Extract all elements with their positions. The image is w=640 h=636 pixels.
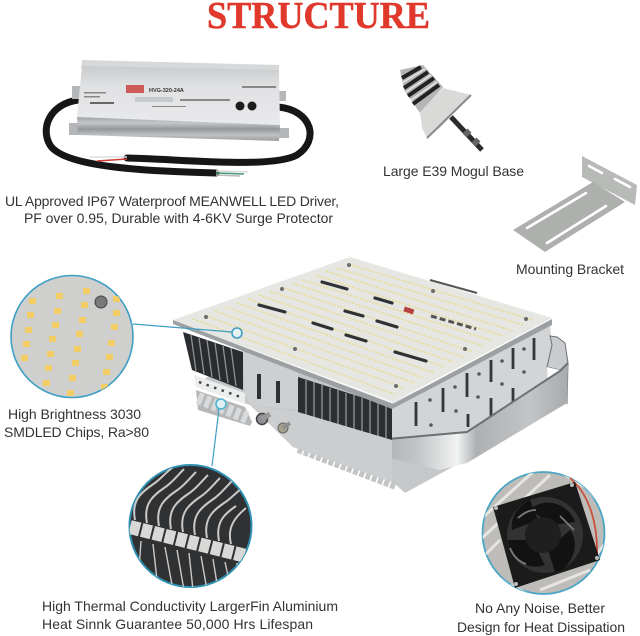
fan caption: No Any Noise, Better	[475, 600, 605, 616]
heat sink caption: Heat Sinnk Guarantee 50,000 Hrs Lifespan	[42, 616, 313, 632]
chips caption: High Brightness 3030	[8, 406, 141, 422]
wavy fin grooves	[198, 398, 250, 419]
red wire	[570, 478, 597, 557]
back ledge	[430, 280, 477, 293]
side plate	[377, 325, 565, 440]
vent plug	[278, 423, 290, 433]
bottom gills	[298, 449, 396, 486]
driver wire ends	[90, 157, 248, 176]
mounting band	[377, 363, 568, 470]
board screws	[204, 263, 528, 388]
callout line: heat sink	[212, 409, 219, 466]
perforated band	[130, 527, 250, 557]
driver mounting tabs	[69, 86, 289, 138]
heat sink background	[130, 465, 252, 587]
lower silver plate	[250, 405, 392, 482]
driver fine print	[84, 86, 276, 107]
chips caption: SMDLED Chips, Ra>80	[4, 424, 149, 440]
collar edge	[427, 95, 471, 138]
driver logo	[126, 85, 144, 93]
lower fin edges	[139, 541, 238, 590]
driver caption: PF over 0.95, Durable with 4-6KV Surge Protector	[24, 210, 333, 226]
stud	[451, 117, 482, 150]
LED fixture	[173, 257, 568, 493]
left fin highlights	[191, 335, 236, 386]
callout line: LED chips	[133, 324, 232, 332]
centre plate slots	[259, 374, 278, 403]
ceramic collar	[420, 88, 471, 138]
lower base body	[195, 350, 568, 493]
mounting bracket image	[513, 156, 637, 252]
board slots	[259, 282, 426, 361]
strip dots	[199, 382, 243, 398]
frame screw holes	[494, 483, 599, 586]
mounting band loop	[547, 336, 568, 403]
fin stripes	[482, 472, 604, 592]
bracket upright	[582, 156, 637, 205]
centre plate	[243, 350, 298, 410]
top LED board	[173, 257, 552, 402]
fan caption	[457, 600, 625, 635]
LED chips	[21, 288, 120, 396]
fan background	[482, 472, 604, 594]
band outline	[377, 363, 568, 440]
panel: heat sink close-up	[130, 465, 252, 590]
fan blades	[508, 500, 575, 572]
nuts	[465, 131, 478, 144]
perforated strip	[194, 375, 245, 404]
mogul caption: Large E39 Mogul Base	[383, 163, 524, 179]
driver caption: UL Approved IP67 Waterproof MEANWELL LED Driver,	[5, 193, 339, 209]
left heat sink	[183, 332, 243, 390]
driver model: HVG-320-24A	[149, 88, 184, 94]
thread highlights	[402, 69, 437, 100]
side plate holes	[428, 347, 526, 427]
cable gland	[256, 414, 270, 424]
driver ribs	[77, 117, 280, 141]
fan frame	[493, 482, 600, 588]
callout marker: LED chips	[232, 328, 242, 338]
chip board screw	[95, 296, 107, 308]
top LED board edge	[173, 319, 552, 409]
driver cable right	[127, 107, 310, 162]
LED driver image	[46, 60, 310, 176]
side plate slots	[416, 338, 534, 427]
chip background	[11, 276, 133, 398]
callout marker: heat sink	[216, 399, 226, 409]
E39 mogul base image	[400, 65, 482, 150]
board marking	[403, 307, 476, 329]
panel: fan close-up	[480, 470, 605, 600]
front heat sink	[298, 377, 392, 440]
wavy fins	[134, 468, 246, 590]
band hole	[547, 367, 560, 380]
fan hub	[525, 517, 561, 553]
bracket caption: Mounting Bracket	[516, 261, 624, 277]
threaded shell	[400, 65, 443, 113]
heat sink caption: High Thermal Conductivity LargerFin Aluminium	[42, 598, 338, 614]
fan caption: Design for Heat Dissipation	[457, 619, 625, 635]
driver caption	[5, 193, 339, 226]
fan opening	[507, 497, 583, 573]
bracket plate	[513, 182, 625, 252]
driver cable left	[46, 100, 216, 173]
panel: LED chips close-up	[11, 276, 133, 398]
thread stripes	[402, 67, 439, 104]
driver housing top	[81, 60, 279, 72]
bracket slots	[527, 166, 630, 243]
left wavy fins	[196, 390, 252, 426]
front fin highlights	[306, 380, 386, 438]
driver label face	[77, 66, 280, 125]
LED rows	[193, 264, 533, 394]
blade highlights	[510, 510, 574, 564]
heat sink caption	[42, 598, 338, 632]
driver knobs	[236, 102, 256, 110]
chips caption	[4, 406, 149, 440]
